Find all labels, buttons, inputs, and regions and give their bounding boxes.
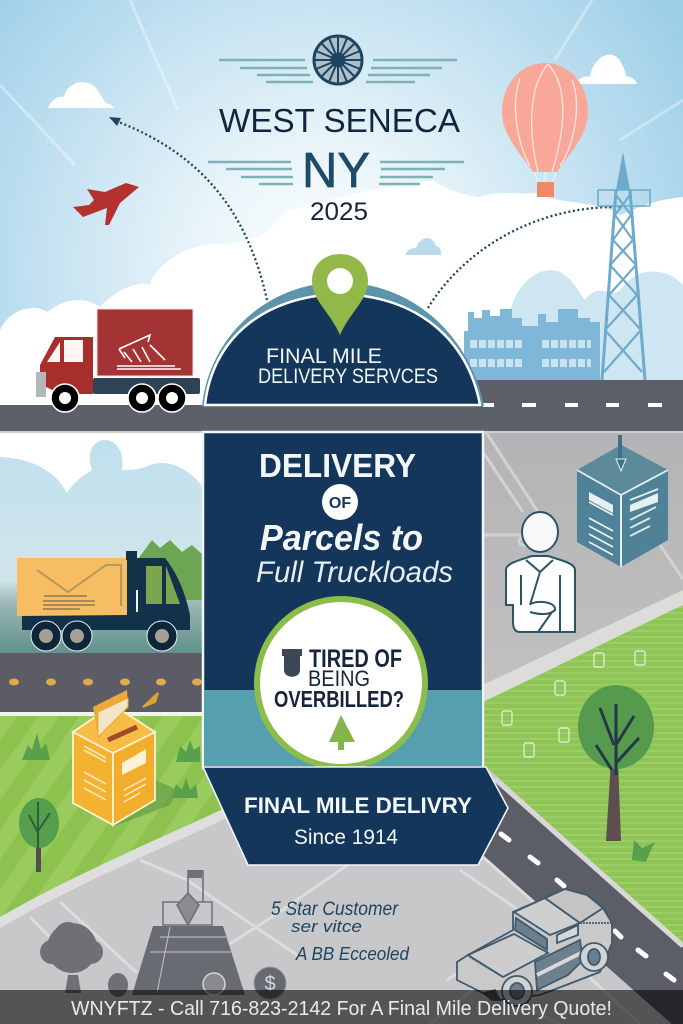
text: 5 star customer service: A BB Ecceoled <box>295 944 410 964</box>
cloud: small blue <box>405 238 441 255</box>
clouds: white skyline band <box>0 180 683 410</box>
small field markers <box>502 651 645 757</box>
right scene: green field <box>483 590 683 960</box>
icon: person in shirt <box>506 512 575 632</box>
text: 5 star customer service: ser vitce <box>291 917 362 936</box>
left scene: road <box>0 653 203 716</box>
heading: parcels to: Parcels to <box>260 517 423 558</box>
text: 5 star customer service: 5 Star Customer <box>271 899 399 920</box>
cloud: behind buildings <box>509 270 683 380</box>
arch label line 2: DELIVERY SERVCES <box>258 365 438 388</box>
callout line 3: OVERBILLED? <box>274 686 404 712</box>
callout line 2: BEING <box>308 666 370 691</box>
gray jeep <box>457 889 612 1006</box>
buildings <box>464 309 600 380</box>
cloud: top right <box>574 55 637 84</box>
badge: of: OF <box>329 495 351 512</box>
title: West Seneca: WEST SENECA <box>219 102 460 139</box>
sky light rays <box>0 0 683 165</box>
tree: small left <box>19 798 59 872</box>
dollar coin <box>254 967 286 999</box>
heading: delivery: DELIVERY <box>259 447 416 484</box>
arch: final mile delivery services <box>202 282 484 406</box>
tree: large right <box>578 685 654 841</box>
emblem: wheel with wings <box>219 36 457 84</box>
left scene: sky backdrop <box>0 433 203 655</box>
red delivery truck <box>36 309 200 412</box>
ribbon: since 1914 <box>203 767 508 865</box>
gray fort with flag <box>132 870 245 995</box>
road: top <box>0 380 683 433</box>
location pin <box>312 254 368 335</box>
footer bar <box>0 990 683 1024</box>
grass tufts <box>22 733 655 862</box>
text: 5 star customer service <box>271 899 410 964</box>
panel: main navy <box>203 432 483 768</box>
callout line 1: TIRED OF <box>309 645 402 673</box>
icon: hex building <box>577 435 668 567</box>
diagonal road <box>483 779 683 1024</box>
left scene: white cloud <box>0 433 203 493</box>
ribbon line 2: Since 1914 <box>294 826 398 849</box>
dotted route left <box>109 117 267 300</box>
icon: green arrow <box>329 715 355 750</box>
right scene: map streets <box>483 432 683 579</box>
heading: full truckloads: Full Truckloads <box>256 556 453 589</box>
icon: dark badge <box>282 649 302 677</box>
ribbon line 1: FINAL MILE DELIVRY <box>244 793 472 818</box>
left green field <box>0 716 232 920</box>
bottom gray map ground <box>0 770 683 1024</box>
right scene: gray map ground <box>483 433 683 713</box>
left scene: hills <box>130 540 203 600</box>
cloud: top left <box>48 82 114 108</box>
arch label line 1: FINAL MILE <box>266 345 382 368</box>
title: NY: NY <box>302 144 370 198</box>
background: sky <box>0 0 683 410</box>
gray tree <box>40 922 128 997</box>
dotted route right <box>428 207 622 308</box>
wing lines beside NY <box>208 162 464 184</box>
year: 2025 <box>310 198 368 226</box>
footer bar: WNYFTZ - Call 716-823-2142 For A Final Mile Delivery Quote! <box>71 998 612 1020</box>
airplane <box>73 183 139 225</box>
dollar coin: $ <box>264 973 276 995</box>
panel teal band <box>204 690 482 766</box>
badge: of <box>322 484 358 520</box>
yellow cargo truck <box>17 551 190 651</box>
transmission tower <box>598 152 650 380</box>
yellow ballot box <box>73 690 178 826</box>
hot air balloon <box>502 63 588 197</box>
callout circle: tired of being overbilled <box>257 599 425 767</box>
